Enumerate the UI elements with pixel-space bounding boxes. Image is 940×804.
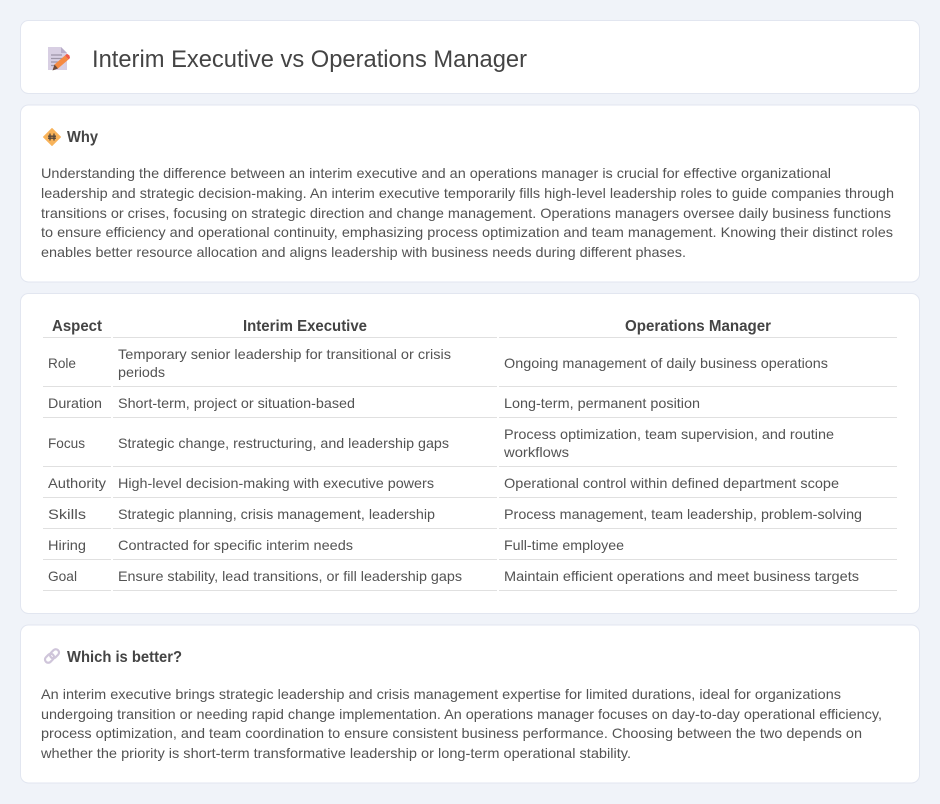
row: duration: Short-term, project or situation-based [118, 395, 355, 411]
panel: title header [20, 20, 920, 94]
row: hiring [43, 537, 897, 560]
row: focus: Strategic change, restructuring, and leadership gaps [118, 435, 449, 451]
text block: which is better explanation: undergoing transition or needing rapid change implementation. An operations manager focuses on day-to-day operational efficiency, [41, 706, 882, 722]
row: duration [43, 395, 897, 418]
table header row: Operations Manager [625, 318, 771, 335]
row: focus: workflows [503, 444, 569, 460]
text block: why explanation: to ensure efficiency and operational continuity, emphasizing process optimization and team management. Knowing their distinct roles [41, 224, 893, 240]
panel: which is better [20, 625, 920, 783]
row: role: periods [118, 364, 165, 380]
heading: why: Why [67, 129, 98, 146]
panel: comparison table [20, 294, 920, 614]
panel: why [20, 105, 920, 282]
row: skills [43, 506, 897, 528]
icon: link [44, 648, 60, 664]
row: skills: Skills [48, 506, 86, 522]
row: hiring: Contracted for specific interim needs [118, 537, 353, 553]
row: goal [43, 568, 897, 590]
text block: why explanation: leadership and strategic decision-making. An interim executive temporarily fills high-level leadership roles to guide companies through [41, 185, 894, 201]
row: goal: Goal [48, 568, 77, 584]
row: authority: High-level decision-making with executive powers [118, 475, 434, 491]
text block: why explanation: Understanding the difference between an interim executive and an operations manager is crucial for effective organizational [41, 165, 831, 181]
text block: which is better explanation: process optimization, and team coordination to ensure consistent business performance. Choosing between the two depends on [41, 725, 862, 741]
row: authority: Authority [48, 475, 106, 491]
row: duration: Long-term, permanent position [504, 395, 700, 411]
table header row: Aspect [52, 318, 103, 335]
text block: which is better explanation: whether the priority is short-term transformative leadership or long-term operational stability. [40, 745, 631, 761]
text block: why explanation: transitions or crises, focusing on strategic direction and change management. Operations managers oversee daily business functions [41, 205, 891, 221]
text block: why explanation [41, 165, 894, 260]
title: Interim Executive vs Operations Manager [92, 46, 527, 73]
icon: memo with pencil [48, 47, 70, 70]
table header row: Interim Executive [243, 318, 367, 335]
icon: orange diamond [44, 128, 60, 146]
row: role: Ongoing management of daily business operations [504, 355, 828, 371]
row: authority [43, 475, 897, 498]
table header row [43, 318, 897, 338]
row: focus: Focus [48, 435, 85, 451]
row: goal: Ensure stability, lead transitions, or fill leadership gaps [118, 568, 462, 584]
row: hiring: Full-time employee [504, 537, 624, 553]
heading: which is better: Which is better? [67, 649, 182, 666]
row: duration: Duration [48, 395, 102, 411]
row: role: Temporary senior leadership for transitional or crisis [118, 346, 451, 362]
row: skills: Strategic planning, crisis management, leadership [118, 506, 435, 522]
row: skills: Process management, team leadership, problem-solving [504, 506, 862, 522]
row: authority: Operational control within defined department scope [504, 475, 839, 491]
row: hiring: Hiring [48, 537, 86, 553]
text block: why explanation: enables better resource allocation and aligns leadership with business needs during different phases. [41, 244, 686, 260]
text block: which is better explanation: An interim executive brings strategic leadership and crisis management expertise for limited durations, ideal for organizations [41, 686, 841, 702]
row: goal: Maintain efficient operations and meet business targets [504, 568, 859, 584]
text block: which is better explanation [40, 686, 882, 761]
row: focus [43, 426, 897, 466]
row: role: Role [48, 355, 76, 371]
row: role [43, 346, 897, 386]
row: focus: Process optimization, team supervision, and routine [504, 426, 834, 442]
